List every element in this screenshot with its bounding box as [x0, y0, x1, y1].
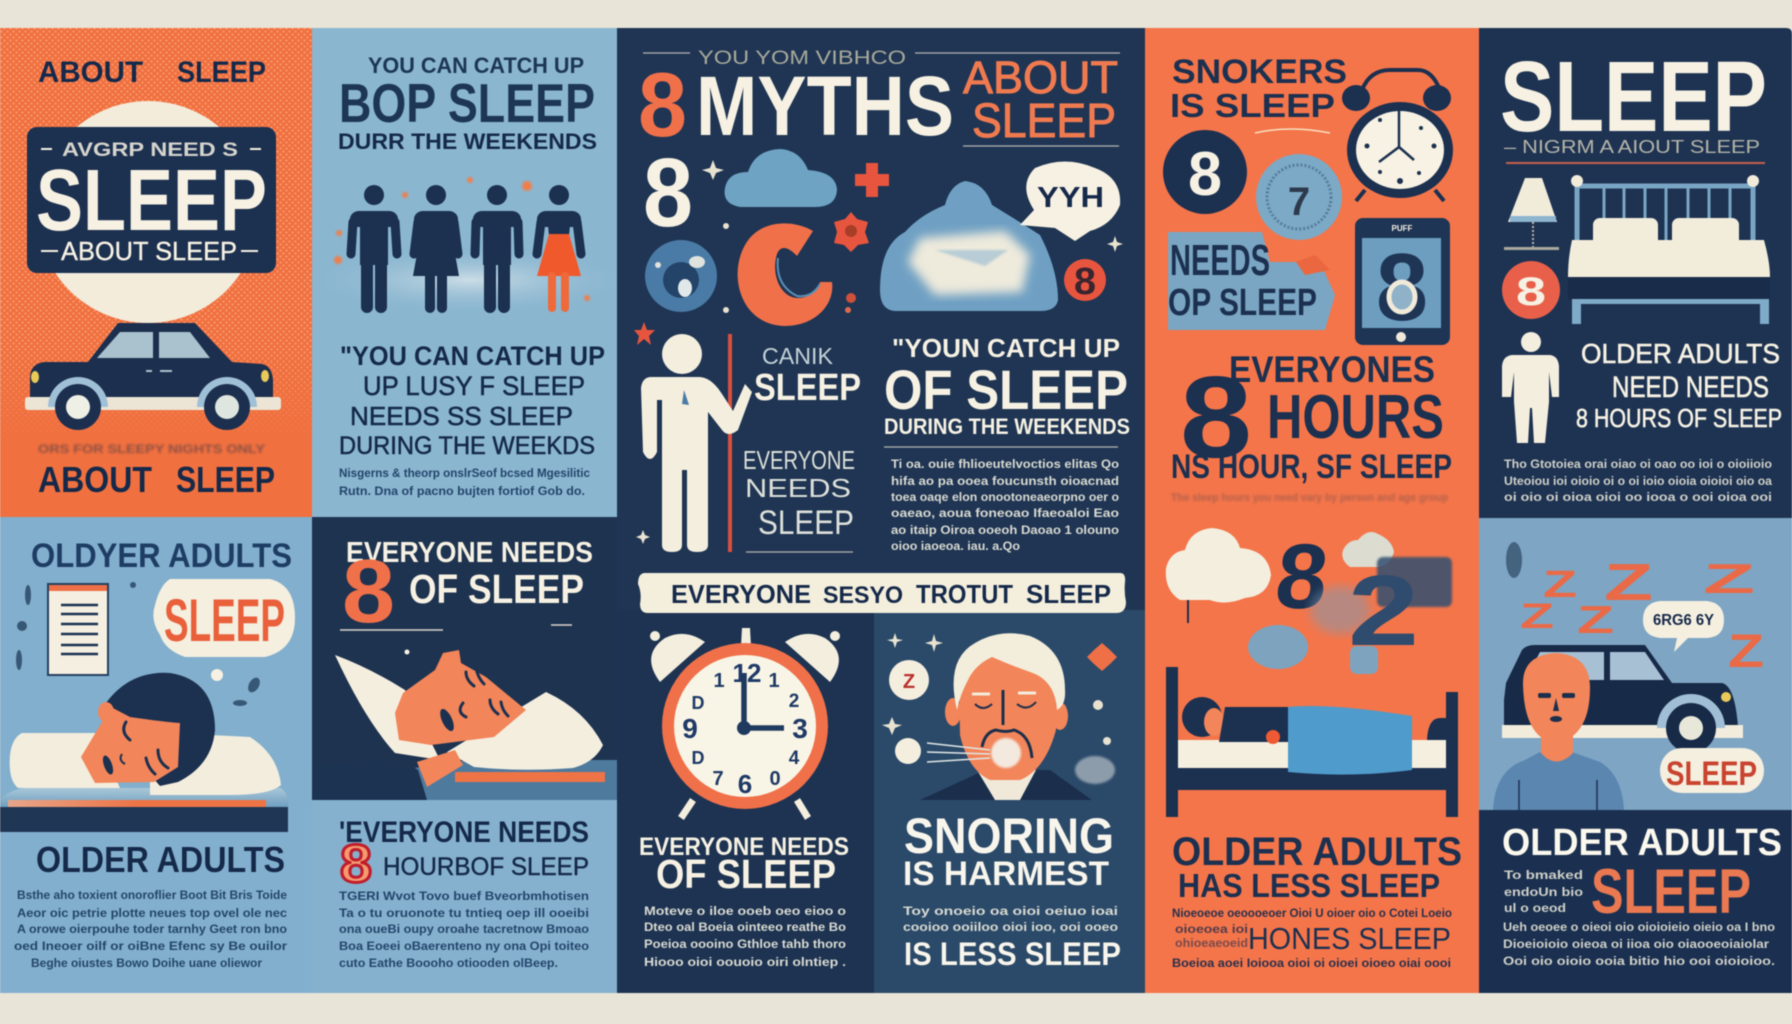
label box: sleep: ABOUT SLEEP — [61, 236, 237, 266]
text: canik sleep — [754, 343, 861, 409]
body text: Hiooo oioi oouoio oiri olntiep . — [644, 955, 846, 969]
label: needs of sleep — [1168, 232, 1335, 330]
panel: sleep, dark with bed — [1479, 28, 1792, 518]
icon: orange gear — [834, 212, 869, 252]
heading: older adults has less sleep: HAS LESS SLEEP — [1178, 867, 1440, 904]
body text: ona oueBi oupy oroahe tacretnow Bmoao — [339, 922, 589, 936]
label box: sleep: AVGRP NEED S — [62, 140, 238, 161]
badge: 8 — [1064, 259, 1106, 303]
body text with inline heading: Boeioa aoei Ioiooa oioi oi oioei oioeo oiai oooi — [1172, 956, 1451, 970]
text: older adults need — [1576, 338, 1782, 433]
icon: small cloud — [1342, 532, 1394, 567]
icon: blue circle — [645, 240, 717, 312]
body text with inline heading: Nioeoeoe oeoooeoer Oioi U oioer oio o Cotei Loeio — [1172, 906, 1452, 920]
sparkles — [882, 633, 1111, 745]
cream moon circle — [37, 101, 259, 323]
heading: snokers is sleep: SNOKERS — [1172, 53, 1347, 91]
icon: phone with 8 — [1355, 218, 1450, 345]
icon: crescent moon — [738, 223, 856, 326]
text: everyones 8 hours: 8 — [1180, 352, 1252, 482]
panel: catch up on sleep, blue with people — [300, 28, 640, 517]
faded caption: ORS FOR SLEEPY NIGHTS ONLY — [38, 442, 265, 456]
icon: red alarm clock: 7 — [712, 768, 724, 790]
callout: speech bubble — [1643, 601, 1724, 652]
title: 8 myths: 8 — [638, 55, 687, 156]
body text — [339, 889, 589, 970]
text: everyones 8 hours: EVERYONES — [1229, 349, 1435, 390]
title: 8 myths: MYTHS — [696, 59, 954, 153]
icon: alarm clock — [1342, 70, 1453, 201]
icon: small bubble — [895, 738, 921, 764]
heading: about sleep bottom: SLEEP — [176, 459, 275, 500]
text: catch up of sleep: DURING THE WEEKENDS — [884, 414, 1130, 439]
body text: Ooi oio oioio ooia bitio hio ooi oioioioo. — [1503, 954, 1775, 968]
icon: red alarm clock: 1 — [713, 670, 725, 692]
body text beside sleep: ul o oeod — [1504, 901, 1566, 915]
banner: everyone pill: SLEEP — [1026, 579, 1111, 609]
body text — [339, 466, 590, 498]
illustration: person in bed — [1166, 667, 1458, 817]
body text: Boa Eoeei oBaerenteno ny ona Opi toiteo — [339, 939, 589, 953]
icon: orange Z letters: Z — [1604, 554, 1653, 612]
illustration: person — [1493, 653, 1624, 810]
icon: red alarm clock: 3 — [792, 713, 808, 744]
body text beside sleep: To bmaked — [1504, 868, 1583, 882]
heading: snokers is sleep — [1170, 53, 1347, 124]
body text — [644, 904, 846, 969]
icon: car — [25, 323, 281, 430]
headline: snoring is harmest — [903, 808, 1114, 893]
banner: everyone pill: EVERYONE — [671, 579, 811, 609]
text: everyone needs sleep — [743, 445, 855, 542]
badge: 8 orange: 8 — [1516, 270, 1546, 314]
heading: about sleep bottom — [38, 459, 275, 500]
badge: 7 blue: 7 — [1288, 180, 1310, 224]
body text: A orowe oierpouhe toder tarnhy Geet ron bno — [17, 922, 287, 936]
heading: about sleep bottom: ABOUT — [38, 459, 152, 500]
heading: everyone needs: EVERYONE NEEDS — [346, 537, 593, 569]
text: everyones 8 hours: HOURS — [1267, 383, 1444, 452]
number 8 orange: 8 — [342, 542, 395, 642]
number 8 italic: 8 — [1271, 524, 1333, 628]
icon: orange Z letters: Z — [1577, 599, 1614, 642]
icon: phone with 8: PUFF — [1392, 224, 1413, 233]
icon: orange Z letters — [1520, 554, 1764, 677]
callout: sleep pill: SLEEP — [1666, 755, 1757, 793]
body text: Rutn. Dna of pacno bujten fortiof Gob do. — [339, 484, 585, 498]
faded caption: The sleep hours you need vary by person and age group — [1171, 492, 1448, 504]
text: everyone needs of sleep — [639, 833, 849, 897]
text: catch up of sleep: "YOUN CATCH UP — [892, 333, 1120, 363]
text block: catch up statement: DURING THE WEEKDS — [339, 432, 595, 460]
heading: older adults has less sleep — [1172, 830, 1462, 904]
icon: orange Z letters: Z — [1543, 564, 1577, 606]
panel: drowsy driving, blue with car and person — [1479, 518, 1792, 810]
panel: center title column — [617, 28, 1145, 993]
banner: everyone pill — [638, 573, 1126, 613]
body text: Aeor oic petrie plotte neues top ovel ole nec — [17, 906, 287, 920]
body text — [903, 904, 1118, 934]
badge: 8: 8 — [1074, 261, 1096, 303]
heading: everyone needs dark: 'EVERYONE NEEDS — [339, 816, 589, 849]
icon: blurred number 2: 2 — [1348, 555, 1419, 667]
subtitle: – NIGRM A AIOUT SLEEP — [1504, 137, 1760, 157]
text block: catch up statement: "YOU CAN CATCH UP — [340, 341, 605, 371]
icon: z bubble — [889, 660, 929, 700]
icon: red alarm clock: D — [692, 748, 704, 768]
icon: bed — [1568, 175, 1770, 324]
body text beside sleep: endoUn bio — [1504, 885, 1583, 899]
illustration: sleeper on pillow — [0, 673, 288, 807]
heading block: everyone needs 8 hours — [312, 800, 617, 993]
text: everyone needs sleep: NEEDS — [745, 473, 851, 503]
icon: blurred number 2 — [1310, 555, 1452, 667]
headline: snoring is harmest: SNORING — [904, 808, 1114, 864]
badge: 8 dark — [1163, 130, 1247, 214]
icon: red alarm clock: 2 — [789, 691, 799, 712]
text: everyone needs sleep: EVERYONE — [743, 445, 855, 475]
body text with inline heading — [1172, 906, 1452, 970]
headline: snoring is harmest: IS HARMEST — [903, 855, 1109, 893]
body text: Ueh oeoee o oieoi oio oioioieio oieio oa I bno — [1503, 920, 1775, 934]
heading: older adults: OLDER ADULTS — [36, 839, 285, 880]
body text with inline heading: ohioeaeoeid — [1175, 936, 1248, 950]
body text — [891, 457, 1119, 553]
mattress — [0, 800, 288, 832]
callout: speech bubble: 6RG6 6Y — [1653, 612, 1714, 629]
icon: phone with 8: 8 — [1376, 234, 1428, 341]
body text: oaeao, aoua foneoao Ifaeoaloi Eao — [891, 506, 1119, 520]
icon: sparkles — [636, 160, 1123, 544]
body text: Tho Gtotoiea orai oiao oi oao oo ioi o oioiioio — [1504, 457, 1772, 471]
icon: red alarm clock: 4 — [789, 748, 800, 769]
body text: Ta o tu oruonote tu tntieq oep ill ooeibi — [339, 906, 589, 920]
text: older adults need: OLDER ADULTS — [1581, 338, 1780, 369]
heading: about sleep top: ABOUT — [38, 56, 143, 89]
heading: snokers is sleep: IS SLEEP — [1170, 87, 1335, 124]
icon: red alarm clock: 1 — [768, 670, 780, 692]
icon: red alarm clock: 6 — [738, 769, 752, 799]
body text: toea oaqe elon onootoneaeorpno oer o — [891, 490, 1119, 504]
body text — [1503, 920, 1775, 968]
badge: 7 blue — [1256, 154, 1342, 240]
title: 8 myths — [638, 55, 954, 156]
illustration: pillow cloud — [880, 181, 1058, 311]
body text: oi oio oi oioa oioi oo iooa o ooi oioa ooi — [1504, 490, 1772, 504]
subheading: weekends: DURR THE WEEKENDS — [338, 129, 597, 154]
icon: orange diamond — [1087, 643, 1117, 671]
icon: red alarm clock — [650, 628, 840, 818]
icon: orange Z letters: Z — [1728, 624, 1764, 677]
label box: sleep — [27, 127, 276, 273]
body text: ao itaip Oiroa ooeoh Daoao 1 olouno — [891, 523, 1119, 537]
number 8 red: 8 — [340, 834, 372, 894]
icon: red alarm clock: 12 — [733, 658, 761, 688]
icon: orange Z letters: Z — [1703, 555, 1755, 602]
body text: cuto Eathe Boooho otiooden olBeep. — [339, 956, 558, 970]
heading: hours of sleep: HOURBOF SLEEP — [383, 853, 589, 881]
callout: sleep bubble — [153, 579, 295, 657]
body text — [14, 888, 287, 970]
body text: Bsthe aho toxient onoroflier Boot Bit Bris Toide — [17, 888, 287, 902]
blue blobs — [1248, 625, 1378, 674]
text: everyones 8 hours — [1171, 349, 1452, 486]
icon: orange plus — [855, 163, 889, 197]
number 8 cream: 8 — [643, 138, 693, 247]
callout: myth bubble: YYH — [1037, 182, 1104, 214]
panel: about sleep, orange with car — [0, 28, 312, 517]
text: canik sleep: CANIK — [762, 343, 834, 369]
label box: sleep: SLEEP — [36, 152, 267, 249]
body text: Dteo oal Boeia ointeeo reathe Bo — [644, 920, 846, 934]
text: everyone needs of sleep: OF SLEEP — [656, 851, 836, 897]
body text beside sleep — [1504, 868, 1583, 915]
illustration: snoring man — [920, 633, 1092, 800]
heading: of sleep: OF SLEEP — [409, 566, 584, 612]
label: needs of sleep: OP SLEEP — [1168, 282, 1317, 324]
icon: person pointing — [641, 334, 752, 552]
callout: sleep bubble: SLEEP — [164, 587, 285, 654]
body text: Dioeioioio oieoa oi iioa oio oiaooeoiaiolar — [1503, 937, 1769, 951]
heading: sleep orange: SLEEP — [1591, 857, 1751, 927]
badge: 8 dark: 8 — [1188, 140, 1222, 209]
callout: myth bubble — [1020, 162, 1120, 241]
text: catch up of sleep: OF SLEEP — [884, 358, 1128, 421]
body text with inline heading: oioeoea ioi — [1175, 922, 1248, 936]
heading: older adults has less sleep: OLDER ADULTS — [1172, 830, 1462, 874]
panel: older adults sleep, dark bottom right — [1479, 810, 1792, 993]
body text: oioo iaoeoa. iau. a.Qo — [891, 539, 1020, 553]
body text — [1504, 457, 1772, 504]
icon: standing person — [1502, 332, 1559, 443]
text: everyone needs sleep: SLEEP — [758, 504, 854, 542]
body text with inline heading: HONES SLEEP — [1248, 921, 1451, 956]
headline: is less sleep: IS LESS SLEEP — [904, 936, 1121, 972]
text: canik sleep: SLEEP — [754, 367, 861, 409]
body text: Poeioa oooino Gthloe tahb thoro — [644, 937, 846, 951]
icon: red alarm clock: 0 — [769, 768, 781, 790]
body text: cooioo ooiiloo oioi ioo, ooi ooeo — [903, 920, 1118, 934]
heading: about sleep top — [38, 56, 266, 89]
heading: you can catch up: YOU CAN CATCH UP — [368, 53, 584, 78]
icon: four people — [350, 185, 581, 308]
text: everyone needs of sleep: EVERYONE NEEDS — [639, 833, 849, 861]
body text: TGERI Wvot Tovo buef Bveorbmhotisen — [339, 889, 589, 903]
body text: Nisgerns & theorp onslrSeof bcsed Mgesilitic — [339, 466, 590, 480]
heading: oldyer adults: OLDYER ADULTS — [31, 537, 292, 575]
heading: older adults: OLDER ADULTS — [1502, 822, 1782, 864]
banner: everyone pill: TROTUT — [916, 579, 1013, 609]
text block: catch up statement — [339, 341, 605, 460]
badge: 8 orange — [1502, 261, 1560, 319]
banner: everyone pill: SESYO — [823, 582, 903, 609]
title: about sleep: ABOUT — [963, 52, 1118, 103]
icon: lamp — [1504, 178, 1559, 250]
icon: red alarm clock: 9 — [682, 713, 698, 744]
label: needs of sleep: NEEDS — [1170, 236, 1270, 285]
body text: Beghe oiustes Bowo Doihe uane oliewor — [31, 956, 262, 970]
text block: catch up statement: NEEDS SS SLEEP — [350, 401, 573, 431]
icon: car — [1502, 645, 1743, 753]
illustration: sleeping face on pillow — [312, 650, 605, 800]
panel: snorers, orange column — [1145, 28, 1479, 993]
icon: z bubble: Z — [903, 671, 915, 693]
panel: everyone needs 8, dark with sleeper — [312, 517, 617, 993]
icon: red alarm clock: D — [692, 693, 704, 713]
body text: oed Ineoer oilf or oiBne Efenc sy Be ouilor — [14, 939, 287, 953]
star — [634, 322, 655, 345]
text block: catch up statement: UP LUSY F SLEEP — [363, 371, 585, 401]
heading: bop sleep: BOP SLEEP — [339, 72, 595, 134]
heading: about sleep top: SLEEP — [177, 56, 266, 89]
body text: hifa ao pa ooea foucunsth oioacnad — [891, 474, 1119, 488]
body text: Toy onoeio oa oioi oeiuo ioai — [903, 904, 1118, 918]
title: about sleep — [963, 52, 1118, 148]
title: about sleep: SLEEP — [972, 95, 1116, 148]
panel: older adults, blue with sleeper — [0, 517, 312, 993]
body text: Uteoiou ioi oioio oi o oi ioio oioia oioioi oio oa — [1504, 474, 1772, 488]
text: catch up of sleep — [884, 333, 1130, 439]
kicker: YOU YOM VIBHCO — [698, 48, 906, 69]
icon: cloud — [725, 149, 837, 207]
icon: notepad — [48, 584, 108, 675]
icon: cream cloud — [1166, 528, 1271, 623]
sparks — [16, 582, 262, 706]
icon: orange Z letters: Z — [1520, 597, 1554, 636]
body text: Ti oa. ouie fhlioeutelvoctios elitas Qo — [891, 457, 1119, 471]
body text: Moteve o iloe ooeb oeo eioo o — [644, 904, 846, 918]
orange flecks — [334, 177, 590, 301]
text: everyones 8 hours: NS HOUR, SF SLEEP — [1171, 448, 1452, 486]
